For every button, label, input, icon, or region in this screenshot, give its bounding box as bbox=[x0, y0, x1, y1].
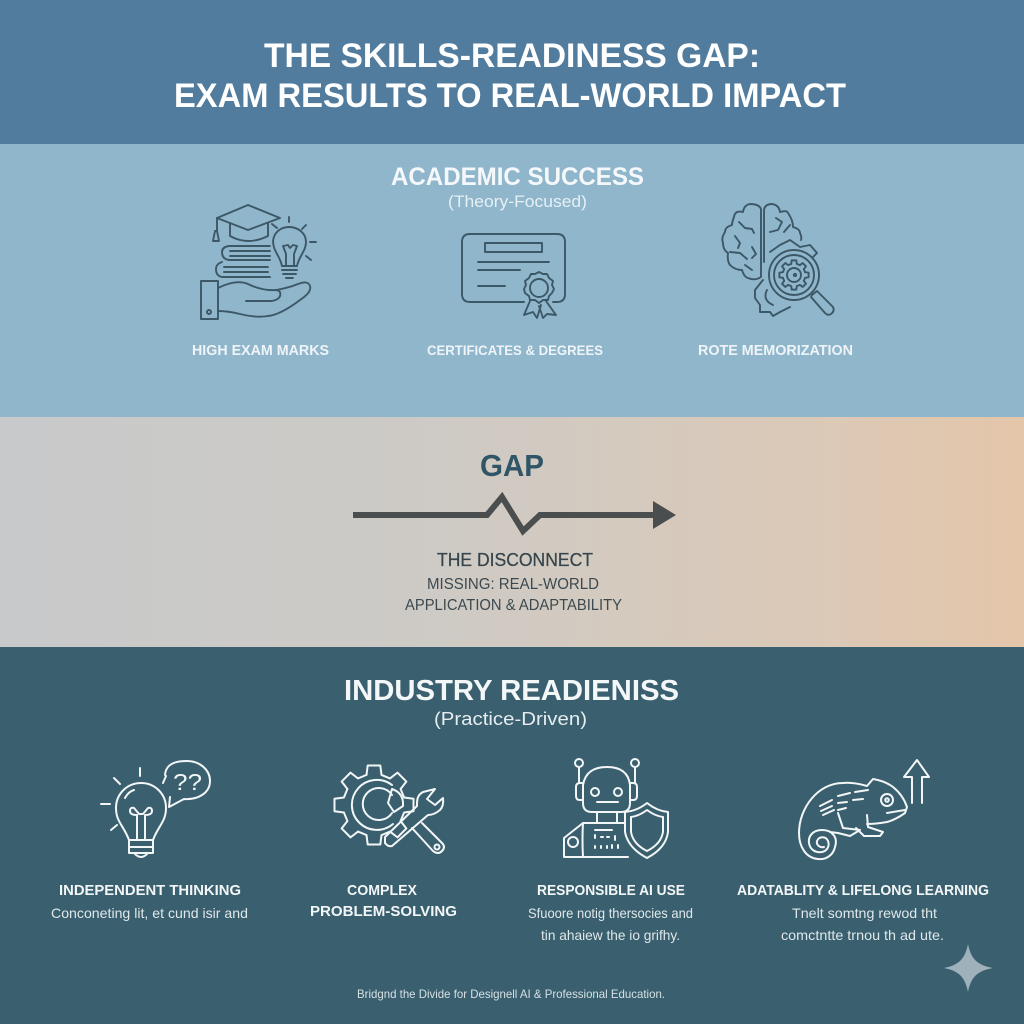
icon: robot with shield bbox=[564, 759, 668, 858]
label: rote memorization: ROTE MEMORIZATION bbox=[698, 343, 853, 359]
icon: sparkle star bbox=[944, 944, 993, 992]
label: certificates and degrees: CERTIFICATES & DEGREES bbox=[427, 342, 603, 358]
label: adaptability and lifelong learning: ADATABLITY & LIFELONG LEARNING bbox=[737, 882, 989, 899]
panel: industry readiness bbox=[0, 647, 1024, 1024]
text: application and adaptability: APPLICATION & ADAPTABILITY bbox=[405, 597, 622, 614]
label: complex problem-solving: COMPLEX bbox=[347, 882, 417, 899]
heading: industry readiness: INDUSTRY READIENISS bbox=[344, 675, 679, 707]
label: complex problem-solving: PROBLEM-SOLVING bbox=[310, 903, 457, 920]
icon: cap, books, bulb and hand bbox=[201, 205, 316, 319]
text: missing real-world: MISSING: REAL-WORLD bbox=[427, 576, 599, 593]
label: complex problem-solving bbox=[310, 882, 457, 920]
subheading: practice-driven: (Practice-Driven) bbox=[434, 709, 587, 729]
label: high exam marks: HIGH EXAM MARKS bbox=[192, 343, 329, 359]
label: responsible ai use: RESPONSIBLE AI USE bbox=[537, 882, 685, 899]
title: THE SKILLS-READINESS GAP: bbox=[264, 37, 760, 75]
icon: chameleon and up arrow bbox=[799, 760, 929, 859]
description: adaptability: comctntte trnou th ad ute. bbox=[781, 927, 944, 943]
heading: gap: GAP bbox=[480, 448, 544, 483]
arrow: broken line bbox=[353, 497, 676, 531]
description: adaptability: Tnelt somtng rewod tht bbox=[792, 905, 937, 921]
description: responsible ai use bbox=[528, 905, 693, 943]
heading: academic success: ACADEMIC SUCCESS bbox=[391, 163, 644, 191]
icon: brain with gears and magnifier bbox=[722, 204, 834, 316]
description: responsible ai use: tin ahaiew the io grifhy. bbox=[541, 927, 680, 943]
icon: bulb with question bubble: ?? bbox=[173, 769, 202, 795]
description: independent thinking: Conconeting lit, et cund isir and bbox=[51, 905, 248, 921]
description: adaptability bbox=[781, 905, 944, 943]
title: EXAM RESULTS TO REAL-WORLD IMPACT bbox=[174, 77, 846, 115]
subheading: theory-focused: (Theory-Focused) bbox=[448, 192, 587, 211]
description: responsible ai use: Sfuoore notig thersocies and bbox=[528, 905, 693, 921]
icon: gear and wrench bbox=[334, 766, 444, 853]
footer note: Bridgnd the Divide for Designell AI & Professional Education. bbox=[357, 987, 665, 1001]
panel: academic success bbox=[0, 144, 1024, 417]
icon: certificate bbox=[462, 234, 565, 318]
icon: bulb with question bubble bbox=[101, 761, 210, 857]
header band bbox=[0, 0, 1024, 144]
title bbox=[174, 37, 846, 115]
panel: the gap bbox=[0, 417, 1024, 647]
label: independent thinking: INDEPENDENT THINKING bbox=[59, 882, 241, 899]
text: the disconnect: THE DISCONNECT bbox=[437, 550, 593, 570]
